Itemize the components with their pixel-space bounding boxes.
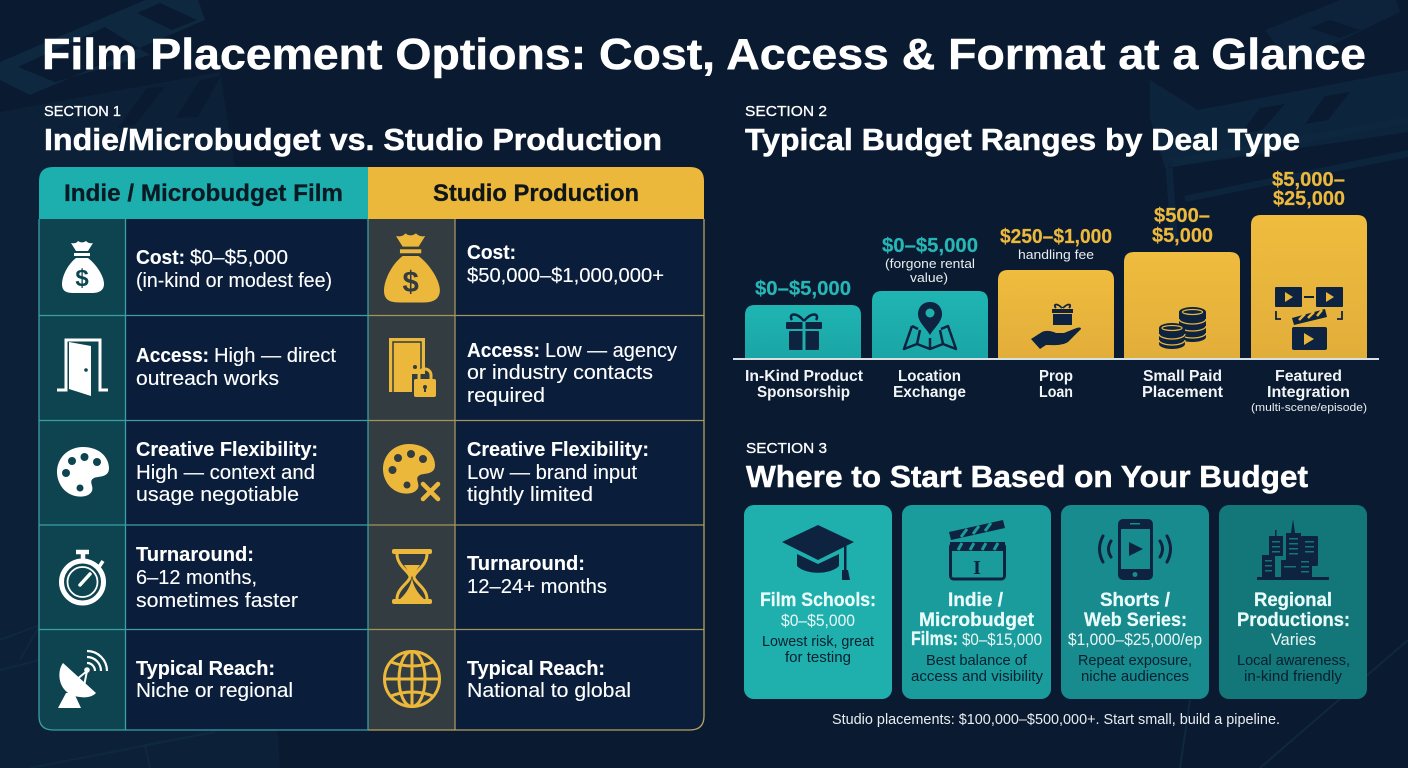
bar: location exchange: $0–$5,000 — [882, 235, 978, 257]
card: regional productions: in-kind friendly — [1244, 668, 1342, 685]
access studio text: required — [467, 385, 545, 407]
reach studio text — [467, 658, 631, 702]
card: shorts web series — [1061, 505, 1209, 699]
section 2 heading: SECTION 2 — [745, 103, 827, 120]
icon: coin stacks — [1159, 307, 1206, 349]
bar: featured integration: Featured — [1275, 368, 1342, 385]
bar: in-kind product sponsorship: In-Kind Product — [745, 368, 864, 385]
bar: location exchange — [872, 235, 988, 401]
bar: small paid placement: $500– — [1154, 205, 1210, 227]
bar: featured integration: (multi-scene/episode) — [1251, 402, 1367, 414]
turnaround indie text: Turnaround: — [136, 544, 254, 566]
access studio text — [467, 340, 677, 407]
bar: prop loan: Prop — [1039, 368, 1073, 385]
card: film schools: $0–$5,000 — [781, 611, 855, 630]
card: shorts web series: Shorts / — [1100, 590, 1171, 611]
bar: location exchange: Location — [898, 368, 961, 385]
turnaround indie text: 6–12 months, — [136, 567, 257, 589]
access studio text: or industry contacts — [467, 362, 653, 384]
table header: indie — [39, 167, 368, 219]
card: indie microbudget films: Best balance of — [926, 652, 1028, 669]
card: indie microbudget films: Indie / — [948, 590, 1004, 611]
icon: palette with x — [383, 444, 438, 499]
access studio text: Low — agency — [545, 340, 677, 362]
bar: featured integration: $5,000– — [1272, 169, 1345, 191]
bar: featured integration: Integration — [1267, 384, 1350, 401]
card: indie microbudget films: access and visibility — [911, 668, 1044, 685]
turnaround indie text: sometimes faster — [136, 590, 298, 612]
cost indie text: (in-kind or modest fee) — [136, 270, 332, 292]
bar: in-kind product sponsorship — [745, 278, 864, 401]
table body background — [39, 219, 704, 730]
card: shorts web series: Web Series: — [1084, 610, 1187, 631]
bar: featured integration — [1251, 169, 1367, 414]
bar: prop loan — [998, 226, 1114, 401]
title: Film Placement Options: Cost, Access & Format at a Glance — [42, 30, 1366, 79]
icon: open door — [57, 340, 108, 396]
card: indie microbudget films: Films: — [911, 629, 958, 650]
icon: money bag (studio): $ — [402, 267, 419, 299]
access studio text: Access: — [467, 340, 540, 362]
bar: in-kind product sponsorship: Sponsorship — [757, 384, 850, 401]
creative indie text: High — context and — [136, 462, 315, 484]
card: regional productions — [1219, 505, 1367, 699]
cost studio text: Cost: — [467, 242, 516, 264]
creative indie text: Creative Flexibility: — [136, 439, 318, 461]
section 1 heading: Indie/Microbudget vs. Studio Production — [44, 122, 662, 157]
card: shorts web series: niche audiences — [1081, 668, 1189, 685]
card: regional productions: Productions: — [1237, 610, 1350, 631]
table header: studio — [368, 167, 704, 219]
section 3 heading: SECTION 3 — [746, 440, 827, 457]
access indie text: High — direct — [214, 345, 336, 367]
creative studio text: Low — brand input — [467, 462, 637, 484]
bar: small paid placement: Placement — [1142, 384, 1224, 401]
bar: location exchange: value) — [910, 270, 948, 285]
creative studio text: Creative Flexibility: — [467, 439, 649, 461]
panel: comparison table — [39, 167, 704, 730]
card: shorts web series: $1,000–$25,000/ep — [1068, 630, 1202, 649]
reach indie text: Niche or regional — [136, 680, 293, 702]
section 2 heading: Typical Budget Ranges by Deal Type — [745, 122, 1300, 157]
section 3 heading — [746, 440, 1308, 494]
icon: clapperboard — [949, 520, 1005, 579]
access indie text: outreach works — [136, 368, 279, 390]
card: film schools: for testing — [785, 649, 851, 666]
icon: palette — [57, 447, 109, 497]
footer note: Studio placements: $100,000–$500,000+. Start small, build a pipeline. — [832, 712, 1280, 728]
bar: in-kind product sponsorship: $0–$5,000 — [755, 278, 851, 300]
icon: clapperboard: I — [973, 557, 981, 579]
icon: stopwatch — [62, 552, 104, 603]
cost indie text: $0–$5,000 — [190, 247, 288, 269]
icon: satellite dish — [58, 651, 107, 708]
bar: small paid placement: Small Paid — [1143, 368, 1222, 385]
icon: phone — [1100, 519, 1170, 580]
card: regional productions: Varies — [1271, 630, 1316, 649]
card: indie microbudget films — [902, 505, 1051, 699]
icon: hourglass — [392, 549, 432, 604]
card: film schools — [744, 505, 892, 699]
icon: city skyline — [1257, 519, 1329, 580]
table header: indie: Indie / Microbudget Film — [64, 180, 343, 207]
bar: small paid placement: $5,000 — [1152, 225, 1213, 247]
card: regional productions: Regional — [1254, 590, 1332, 611]
bar: prop loan: handling fee — [1018, 247, 1094, 262]
icon: money bag (studio) — [384, 233, 440, 302]
cost studio text — [467, 242, 664, 287]
section 1 heading — [44, 103, 662, 157]
creative studio text: tightly limited — [467, 484, 593, 506]
bar: prop loan: $250–$1,000 — [1000, 226, 1112, 248]
turnaround studio text — [467, 553, 607, 598]
access indie text: Access: — [136, 345, 209, 367]
bar: prop loan: Loan — [1039, 384, 1073, 401]
card: film schools: Lowest risk, great — [762, 633, 875, 650]
section 1 heading: SECTION 1 — [44, 103, 121, 120]
creative indie text: usage negotiable — [136, 484, 299, 506]
icon: graduation cap — [782, 525, 854, 580]
reach indie text — [136, 658, 293, 702]
card: regional productions: Local awareness, — [1237, 652, 1350, 669]
access indie text — [136, 345, 336, 390]
section 3 heading: Where to Start Based on Your Budget — [746, 459, 1308, 494]
bar: location exchange: (forgone rental — [885, 256, 975, 271]
cost indie text: Cost: — [136, 247, 185, 269]
section 2 heading — [745, 103, 1300, 157]
reach indie text: Typical Reach: — [136, 658, 275, 680]
cost indie text — [136, 247, 332, 292]
table header: studio: Studio Production — [433, 180, 639, 207]
bar: location exchange: Exchange — [893, 384, 966, 401]
reach studio text: Typical Reach: — [467, 658, 605, 680]
bar: featured integration: $25,000 — [1273, 188, 1345, 210]
turnaround studio text: 12–24+ months — [467, 576, 607, 598]
card: shorts web series: Repeat exposure, — [1078, 652, 1192, 669]
bar chart: budget ranges — [733, 169, 1379, 414]
icon: locked door — [389, 338, 438, 399]
bar: small paid placement — [1124, 205, 1240, 401]
turnaround studio text: Turnaround: — [467, 553, 585, 575]
card: indie microbudget films: $0–$15,000 — [962, 630, 1042, 649]
cost studio text: $50,000–$1,000,000+ — [467, 265, 664, 287]
icon: money bag (indie): $ — [75, 265, 89, 292]
icon: money bag (indie) — [62, 241, 104, 293]
creative indie text — [136, 439, 318, 506]
card: film schools: Film Schools: — [760, 590, 876, 611]
creative studio text — [467, 439, 649, 506]
card: indie microbudget films: Microbudget — [919, 610, 1035, 631]
turnaround indie text — [136, 544, 298, 612]
reach studio text: National to global — [467, 680, 631, 702]
icon: globe — [384, 651, 440, 707]
